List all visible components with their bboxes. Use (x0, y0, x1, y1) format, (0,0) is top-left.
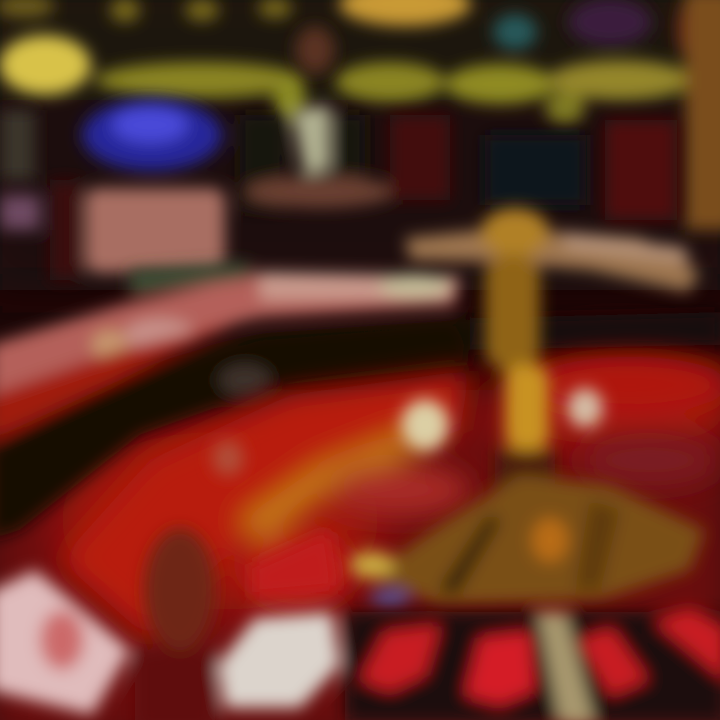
seated figures and table (0, 26, 677, 280)
roulette pockets and cards (0, 528, 720, 720)
top lights and banner (0, 0, 720, 230)
dealer figure and gold centerpiece (212, 208, 705, 608)
wheel red surface and gold highlights (60, 357, 720, 640)
table rim band (0, 262, 720, 540)
